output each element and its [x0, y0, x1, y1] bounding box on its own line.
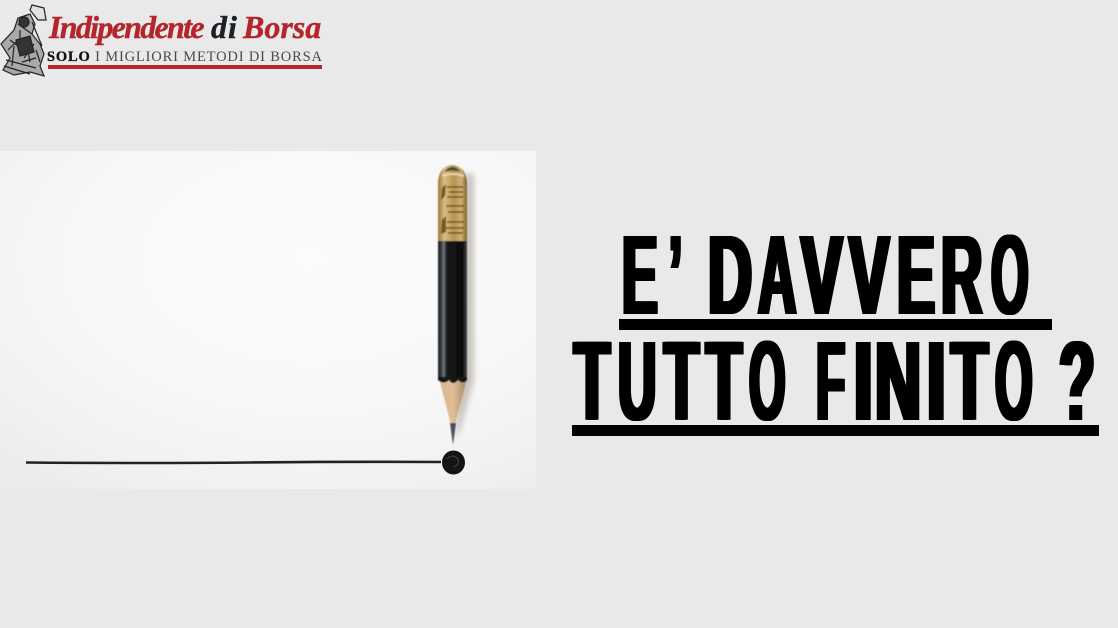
icon: logo figure — [1, 5, 46, 76]
title line 1: D — [708, 212, 752, 338]
logo underline — [48, 65, 322, 69]
icon: pencil — [438, 165, 467, 445]
logo script name: di — [211, 9, 238, 45]
title: T — [951, 318, 988, 444]
title line 1: ’ — [669, 212, 682, 338]
title line 1: R — [941, 212, 982, 338]
title: ? — [1059, 318, 1095, 444]
title line 1: A — [758, 212, 796, 338]
title: I — [927, 318, 946, 444]
title line 1 — [622, 212, 1029, 338]
title line 1: E — [897, 212, 935, 338]
icon: pencil shadow — [456, 172, 474, 440]
title: T — [706, 318, 742, 444]
title: O — [995, 318, 1033, 444]
title line 1: E — [622, 212, 658, 338]
title line 1: V — [801, 212, 842, 338]
title — [572, 212, 1099, 444]
title: F — [816, 318, 845, 444]
title line 2 — [572, 318, 1095, 444]
logo script name: Borsa — [242, 9, 321, 45]
title: O — [749, 318, 785, 444]
icon: final dot — [442, 450, 465, 474]
logo script name: Indipendente — [48, 9, 204, 45]
logo — [1, 5, 323, 76]
title: N — [874, 318, 921, 444]
line drawn by pencil — [26, 462, 441, 463]
underline 2 — [572, 425, 1099, 436]
title: T — [574, 318, 610, 444]
panel: pencil photo — [0, 151, 536, 489]
underline 1 — [619, 319, 1052, 330]
title line 1: V — [849, 212, 889, 338]
title: T — [664, 318, 699, 444]
title: U — [618, 318, 656, 444]
logo tagline: SOLO I MIGLIORI METODI DI BORSA — [47, 49, 323, 65]
title: I — [854, 318, 873, 444]
title line 1: O — [991, 212, 1029, 338]
